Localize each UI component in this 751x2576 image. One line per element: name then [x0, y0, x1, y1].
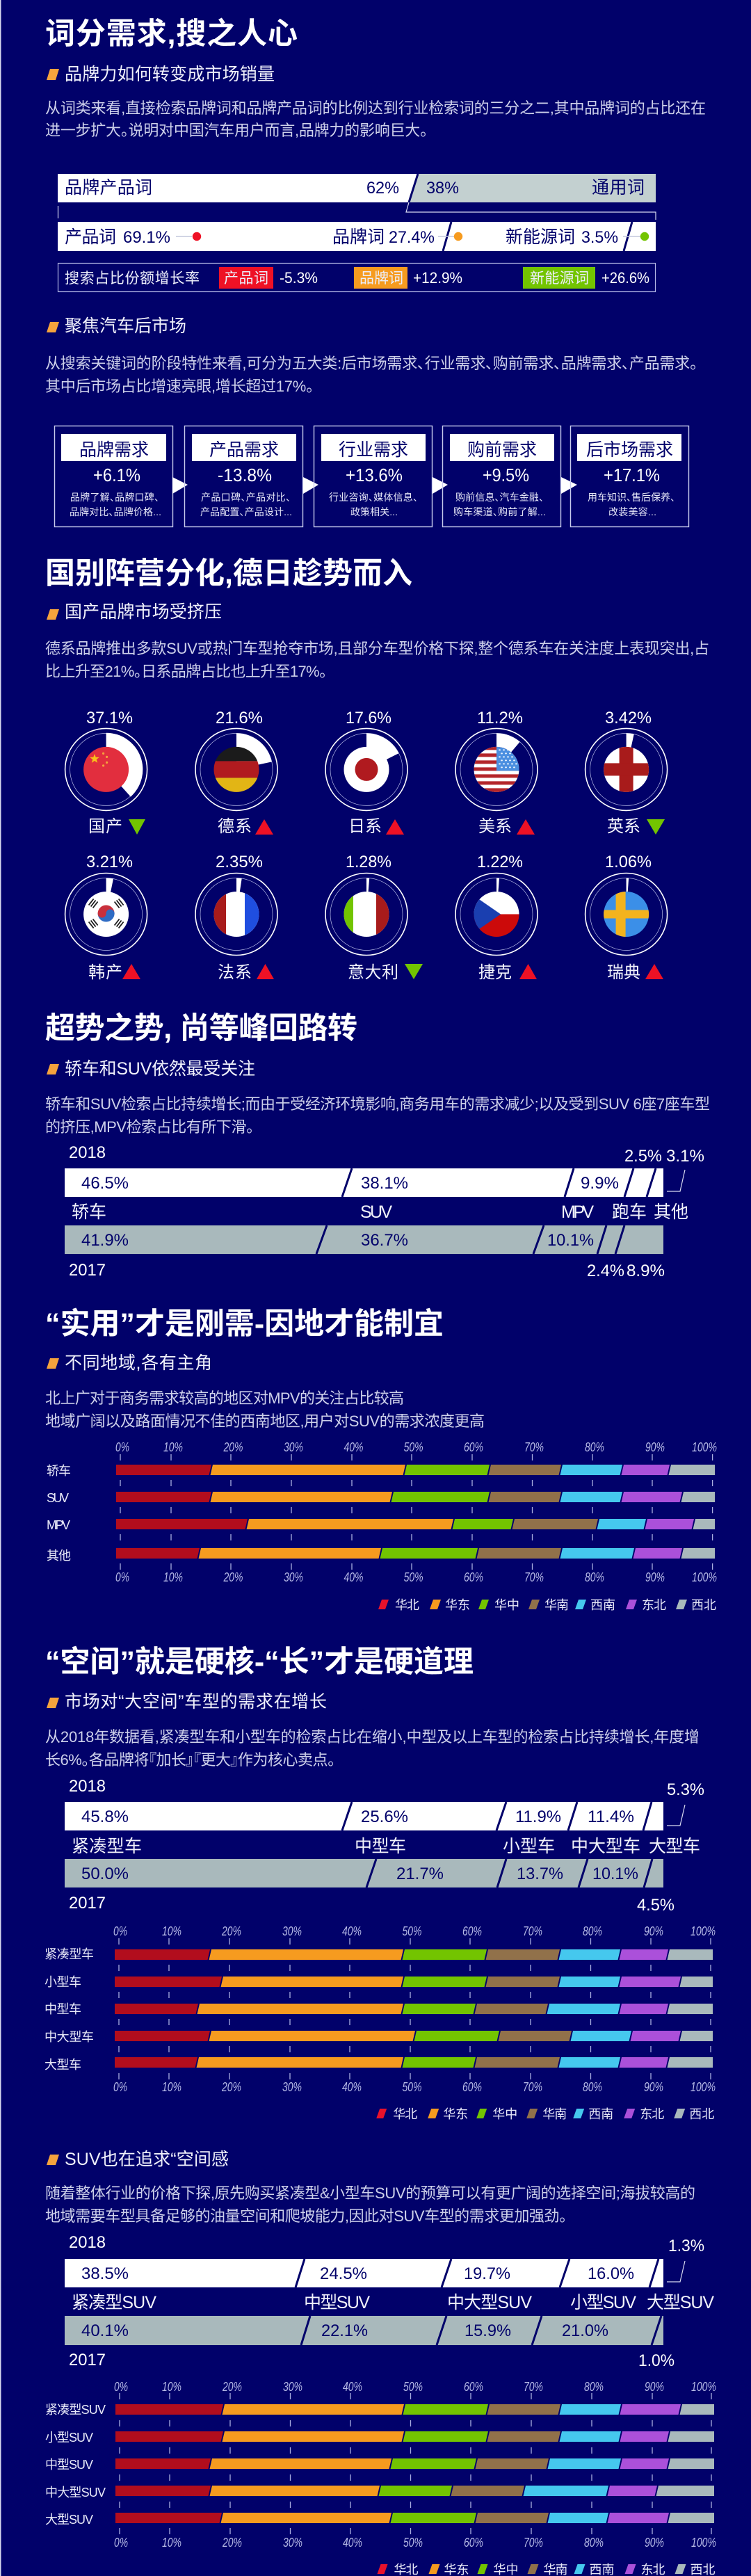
chart: SUV size share 2018 vs 2017: [65, 2233, 714, 2370]
legend: 西北: [689, 2107, 714, 2121]
chart: vehicle type share 2018 vs 2017: [65, 1143, 704, 1280]
growth rate box: 品牌词: [360, 271, 403, 287]
chart: car size share 2018 vs 2017: 45.8%: [81, 1808, 129, 1826]
axis labels top: 90%: [645, 1440, 665, 1454]
subheading: brand power: 品牌力如何转变成市场销量: [65, 65, 275, 84]
legend: 华南: [544, 1598, 569, 1612]
flag: England 3.42%: 3.42%: [605, 709, 652, 727]
axis labels top: 50%: [404, 1440, 423, 1454]
paragraph: regions: [45, 1390, 485, 1430]
chart: car size share 2018 vs 2017: 中大型车: [571, 1837, 640, 1856]
chart: SUV size share 2018 vs 2017: 19.7%: [464, 2264, 510, 2283]
axis labels bottom: 70%: [524, 1570, 544, 1584]
chart: vehicle type share 2018 vs 2017: 8.9%: [627, 1262, 665, 1280]
growth rate box: +26.6%: [601, 269, 649, 287]
growth rate box: 新能源词: [530, 271, 589, 287]
axis labels top: 10%: [162, 2380, 181, 2394]
flag: USA 11.2%: [455, 709, 538, 836]
axis labels top: [114, 2380, 716, 2394]
axis labels bottom: 40%: [342, 2080, 362, 2094]
axis labels bottom: 0%: [113, 2080, 127, 2094]
flag: Japan 17.6%: [325, 709, 407, 836]
row: sedan: 轿车: [47, 1464, 71, 1478]
paragraph: large space: 长6%。各品牌将『加长』『更大』作为核心卖点。: [45, 1751, 335, 1769]
paragraph: aftermarket: [45, 355, 697, 395]
row: compact: 紧凑型车: [45, 1947, 94, 1961]
chart: car size share 2018 vs 2017: 4.5%: [637, 1896, 675, 1915]
row: large SUV: 大型SUV: [45, 2513, 93, 2527]
row: other: [47, 1548, 715, 1561]
subheading: sedan and SUV: 轿车和SUV依然最受关注: [65, 1059, 255, 1079]
paragraph: regions: 地域广阔以及路面情况不佳的西南地区,用户对SUV的需求浓度更高: [45, 1412, 485, 1430]
row: mid-large: 中大型车: [45, 2030, 94, 2044]
card: brand demand: +6.1%: [93, 465, 140, 485]
legend: 华北: [395, 1598, 419, 1612]
row: small: 小型车: [45, 1975, 81, 1989]
flag: Sweden 1.06%: [586, 853, 668, 982]
arrow: [433, 477, 448, 494]
flag: Czech 1.22%: 捷克: [478, 963, 512, 982]
chart: SUV size share 2018 vs 2017: 1.0%: [638, 2351, 675, 2370]
flag: England 3.42%: 英系: [607, 817, 640, 836]
legend: 华中: [492, 2107, 517, 2121]
title: 超势之势, 尚等峰回路转: [45, 1012, 357, 1045]
card: brand demand: [54, 426, 172, 527]
paragraph: brand terms: 进一步扩大。说明对中国汽车用户而言,品牌力的影响巨大。: [45, 122, 428, 139]
axis labels bottom: 0%: [115, 1570, 129, 1584]
card: industry demand: 政策相关...: [350, 506, 398, 517]
axis labels top: 100%: [691, 2380, 716, 2394]
chart: SUV size share 2018 vs 2017: 22.1%: [321, 2321, 368, 2340]
flag: Czech 1.22%: [455, 853, 538, 982]
subheading: SUV space: SUV也在追求“空间感: [65, 2150, 229, 2169]
paragraph: SUV space: [45, 2184, 695, 2225]
panel: regional demand: [45, 1307, 718, 1612]
arrow: [303, 477, 318, 494]
chart: vehicle type share 2018 vs 2017: 3.1%: [666, 1147, 704, 1166]
flag: Czech 1.22%: 1.22%: [477, 853, 523, 871]
growth rate box: [58, 263, 655, 292]
paragraph: german and japanese brands: 比上升至21%。日系品牌占比也上升至17%。: [45, 663, 327, 680]
chart: car size share 2018 vs 2017: 10.1%: [592, 1865, 638, 1883]
flag: Korea 3.21%: [65, 853, 147, 982]
flag: Korea 3.21%: 韩产: [88, 963, 122, 982]
chart: vehicle type share 2018 vs 2017: 2.5%: [624, 1147, 662, 1166]
axis labels top: 60%: [462, 1924, 482, 1938]
chart: vehicle type share 2018 vs 2017: 2018: [69, 1143, 106, 1162]
row: compact SUV: 紧凑型SUV: [45, 2403, 106, 2417]
axis labels top: 30%: [284, 1440, 303, 1454]
chart: SUV size share 2018 vs 2017: 21.0%: [562, 2321, 608, 2340]
row: mid-large SUV: [46, 2486, 714, 2498]
paragraph: german and japanese brands: 德系品牌推出多款SUV或热门车型抢夺市场,且部分车型价格下探,整个德系车在关注度上表现突出,占: [45, 640, 709, 657]
flag: Sweden 1.06%: 瑞典: [607, 963, 640, 982]
legend: 东北: [640, 2107, 664, 2121]
row: midsize: 中型车: [45, 2002, 81, 2016]
card: product demand: -13.8%: [218, 465, 272, 485]
axis labels bottom: 30%: [283, 2536, 302, 2550]
flag: Italy 1.28%: [325, 853, 423, 982]
paragraph: german and japanese brands: [45, 640, 709, 680]
card: product demand: 产品需求: [209, 440, 279, 460]
axis labels bottom: 80%: [583, 2080, 602, 2094]
chart: car size share 2018 vs 2017: 小型车: [503, 1837, 555, 1856]
axis labels bottom: 80%: [585, 1570, 604, 1584]
connector lines: [58, 202, 656, 220]
axis labels top: 50%: [402, 1924, 421, 1938]
card: industry demand: 行业需求: [339, 440, 408, 460]
card: aftermarket demand: 后市场需求: [586, 440, 673, 460]
axis labels top: 60%: [464, 1440, 483, 1454]
axis labels bottom: 30%: [284, 1570, 303, 1584]
legend: [377, 2563, 715, 2576]
row: SUV: [47, 1492, 715, 1502]
flag: Italy 1.28%: 意大利: [348, 963, 398, 982]
axis labels bottom: 10%: [162, 2080, 181, 2094]
axis labels bottom: 60%: [464, 1570, 483, 1584]
axis labels bottom: 100%: [692, 1570, 717, 1584]
row: mid-large: [46, 2030, 713, 2042]
axis labels bottom: 30%: [282, 2080, 302, 2094]
chart: SUV size share 2018 vs 2017: 40.1%: [81, 2321, 129, 2340]
paragraph: SUV space: 随着整体行业的价格下探,原先购买紧凑型&小型车SUV的预算可以有更广阔的选择空间;海拔较高的: [45, 2184, 695, 2202]
flag: USA 11.2%: 美系: [478, 817, 512, 836]
flag: China 37.1%: [65, 709, 147, 836]
flag: Japan 17.6%: 日系: [348, 817, 382, 836]
bar: brand term breakdown: 品牌词: [332, 227, 385, 247]
axis labels bottom: [114, 2536, 716, 2550]
axis labels top: 20%: [223, 1440, 243, 1454]
axis labels top: 80%: [584, 2380, 604, 2394]
flag: France 2.35%: 2.35%: [216, 853, 263, 871]
axis labels top: 70%: [523, 1924, 542, 1938]
axis labels top: 100%: [691, 1924, 716, 1938]
paragraph: brand terms: 从词类来看,直接检索品牌词和品牌产品词的比例达到行业检索词的三分之二,其中品牌词的占比还在: [45, 99, 706, 117]
bar: brand term breakdown: 3.5%: [581, 228, 618, 247]
axis labels bottom: 20%: [221, 2080, 241, 2094]
legend: 华南: [542, 2107, 567, 2121]
axis labels top: [113, 1924, 716, 1938]
chart: car size share 2018 vs 2017: 紧凑型车: [72, 1837, 142, 1856]
growth rate box: 搜索占比份额增长率: [65, 271, 200, 287]
axis labels bottom: 90%: [645, 1570, 665, 1584]
paragraph: sedan and SUV: [45, 1095, 710, 1136]
chart: region share by SUV size: [45, 2380, 718, 2576]
axis labels bottom: 20%: [222, 2536, 242, 2550]
chart: SUV size share 2018 vs 2017: 紧凑型SUV: [72, 2293, 156, 2312]
chart: car size share 2018 vs 2017: 11.4%: [588, 1808, 634, 1826]
bar: brand term breakdown: 产品词: [65, 227, 116, 247]
axis labels top: 10%: [162, 1924, 181, 1938]
row: mid-large SUV: 中大型SUV: [45, 2486, 106, 2499]
legend: 华北: [393, 2107, 417, 2121]
axis labels top: 40%: [343, 2380, 362, 2394]
card: pre-purchase demand: 购前需求: [467, 440, 537, 460]
chart: vehicle type share 2018 vs 2017: 38.1%: [361, 1174, 408, 1193]
row: small SUV: [46, 2431, 714, 2442]
row: large: [45, 2057, 713, 2070]
axis labels top: 50%: [403, 2380, 423, 2394]
card: aftermarket demand: +17.1%: [604, 465, 660, 485]
chart: vehicle type share 2018 vs 2017: 10.1%: [547, 1231, 594, 1250]
axis labels top: 0%: [115, 1440, 129, 1454]
card: industry demand: [314, 426, 433, 527]
axis labels bottom: 0%: [114, 2536, 128, 2550]
subheading: regions: 不同地域,各有主角: [65, 1353, 212, 1373]
bar: brand term breakdown: [58, 222, 656, 251]
axis labels bottom: 70%: [524, 2536, 543, 2550]
legend: 西南: [590, 1598, 615, 1612]
subheading: large space: 市场对“大空间”车型的需求在增长: [65, 1692, 327, 1712]
chart: car size share 2018 vs 2017: 25.6%: [361, 1808, 408, 1826]
panel: country camps: [45, 557, 709, 982]
chart: SUV size share 2018 vs 2017: 中型SUV: [304, 2293, 370, 2312]
card: product demand: [185, 426, 303, 527]
row: other: 其他: [47, 1549, 71, 1563]
row: SUV: SUV: [47, 1491, 69, 1505]
card: brand demand: 品牌对比、品牌价格...: [70, 506, 161, 517]
axis labels top: 60%: [464, 2380, 483, 2394]
axis labels top: 0%: [114, 2380, 128, 2394]
card: industry demand: +13.6%: [346, 465, 403, 485]
flag: China 37.1%: 国产: [88, 817, 122, 836]
panel: search term demand: [45, 17, 706, 292]
flag: Germany 21.6%: 21.6%: [216, 709, 263, 727]
card: brand demand: 品牌需求: [79, 440, 149, 460]
axis labels top: [115, 1440, 717, 1454]
paragraph: SUV space: 地域需要车型具备足够的油量空间和爬坡能力,因此对SUV车型的需求更加强劲。: [45, 2207, 567, 2225]
chart: car size share 2018 vs 2017: 50.0%: [81, 1865, 129, 1883]
chart: vehicle type share 2018 vs 2017: 其他: [654, 1202, 688, 1222]
card: aftermarket demand: 用车知识、售后保养、: [588, 492, 675, 503]
flag: Germany 21.6%: 德系: [218, 817, 252, 836]
flag: England 3.42%: [586, 709, 668, 836]
row: compact SUV: [46, 2404, 714, 2415]
title: “实用”才是刚需-因地才能制宜: [45, 1307, 444, 1341]
chart: SUV size share 2018 vs 2017: 小型SUV: [570, 2293, 636, 2312]
bar: brand term breakdown: 27.4%: [389, 228, 435, 247]
chart: car size share 2018 vs 2017: 2018: [69, 1777, 106, 1796]
growth rate box: -5.3%: [280, 269, 318, 287]
card: pre-purchase demand: [442, 426, 560, 527]
chart: region share by body type: [47, 1440, 718, 1612]
axis labels bottom: 40%: [343, 2536, 362, 2550]
legend: 华中: [494, 1598, 519, 1612]
axis labels top: 90%: [645, 2380, 664, 2394]
card: aftermarket demand: [570, 426, 688, 527]
bar: brand product terms vs generic terms: 62%: [366, 179, 399, 198]
chart: vehicle type share 2018 vs 2017: 跑车: [612, 1202, 647, 1222]
card: pre-purchase demand: 购车渠道、购前了解...: [453, 506, 546, 517]
paragraph: aftermarket: 从搜索关键词的阶段特性来看,可分为五大类:后市场需求、行业需求、购前需求、品牌需求、产品需求。: [45, 355, 697, 372]
chart: SUV size share 2018 vs 2017: 24.5%: [320, 2264, 367, 2283]
chart: car size share 2018 vs 2017: 11.9%: [515, 1808, 561, 1826]
axis labels top: 90%: [644, 1924, 663, 1938]
axis labels bottom: 70%: [523, 2080, 542, 2094]
subheading: domestic brands: 国产品牌市场受挤压: [65, 602, 222, 622]
paragraph: large space: [45, 1728, 700, 1769]
paragraph: brand terms: [45, 99, 706, 139]
paragraph: aftermarket: 其中后市场占比增速亮眼,增长超过17%。: [45, 378, 314, 395]
chart: vehicle type share 2018 vs 2017: 轿车: [72, 1202, 106, 1222]
row: midsize: [46, 2002, 713, 2014]
paragraph: sedan and SUV: 的挤压,MPV检索占比有所下滑。: [45, 1118, 254, 1136]
chart: car size share 2018 vs 2017: 中型车: [355, 1837, 406, 1856]
title: 词分需求,搜之人心: [45, 17, 298, 51]
subheading: aftermarket: 聚焦汽车后市场: [65, 316, 186, 336]
flag: Germany 21.6%: [195, 709, 277, 836]
flag: Italy 1.28%: 1.28%: [346, 853, 391, 871]
paragraph: large space: 从2018年数据看,紧凑型车和小型车的检索占比在缩小,中型及以上车型的检索占比持续增长,年度增: [45, 1728, 700, 1746]
row: small SUV: 小型SUV: [45, 2431, 93, 2445]
chart: vehicle type share 2018 vs 2017: 2017: [69, 1261, 106, 1280]
row: midsize SUV: [46, 2458, 714, 2470]
card: pre-purchase demand: +9.5%: [483, 465, 529, 485]
axis labels bottom: 20%: [223, 1570, 243, 1584]
panel: vehicle type trend: [45, 1012, 710, 1280]
axis labels bottom: 50%: [404, 1570, 423, 1584]
flag: USA 11.2%: 11.2%: [477, 709, 523, 727]
axis labels top: 20%: [222, 2380, 242, 2394]
panel: aftermarket: [45, 316, 697, 527]
row: large SUV: [46, 2513, 714, 2525]
chart: SUV size share 2018 vs 2017: 15.9%: [465, 2321, 511, 2340]
paragraph: sedan and SUV: 轿车和SUV检索占比持续增长;而由于受经济环境影响,商务用车的需求减少;以及受到SUV 6座7座车型: [45, 1095, 710, 1113]
axis labels bottom: 80%: [584, 2536, 604, 2550]
card: pre-purchase demand: 购前信息、汽车金融、: [455, 492, 544, 503]
axis labels top: 70%: [524, 2380, 543, 2394]
paragraph: regions: 北上广对于商务需求较高的地区对MPV的关注占比较高: [45, 1390, 404, 1407]
chart: SUV size share 2018 vs 2017: 38.5%: [81, 2264, 129, 2283]
chart: vehicle type share 2018 vs 2017: 9.9%: [581, 1174, 619, 1193]
panel: SUV space: [45, 2150, 718, 2576]
axis labels top: 20%: [221, 1924, 241, 1938]
axis labels bottom: 90%: [644, 2080, 663, 2094]
chart: car size share 2018 vs 2017: 大型车: [649, 1837, 700, 1856]
bar: brand product terms vs generic terms: 38%: [426, 179, 459, 198]
chart: SUV size share 2018 vs 2017: 2018: [69, 2233, 106, 2252]
row: sedan: [47, 1464, 715, 1476]
bar: brand product terms vs generic terms: 品牌产品词: [65, 178, 152, 198]
chart: vehicle type share 2018 vs 2017: MPV: [561, 1202, 594, 1222]
legend: 华东: [443, 2107, 468, 2121]
axis labels bottom: 90%: [645, 2536, 664, 2550]
row: compact: [45, 1947, 713, 1960]
axis labels top: 100%: [692, 1440, 717, 1454]
chart: SUV size share 2018 vs 2017: 2017: [69, 2351, 106, 2369]
arrow: [172, 477, 188, 494]
legend: [376, 2107, 714, 2121]
growth rate box: +12.9%: [413, 269, 462, 287]
flag: France 2.35%: [195, 853, 277, 982]
legend: [378, 1598, 716, 1612]
legend: 华东: [445, 1598, 470, 1612]
legend: 东北: [642, 1598, 666, 1612]
row: large: 大型车: [45, 2058, 81, 2072]
axis labels bottom: 10%: [163, 1570, 183, 1584]
title: 国别阵营分化,德日趁势而入: [45, 557, 412, 590]
axis labels bottom: 60%: [462, 2080, 482, 2094]
axis labels top: 0%: [113, 1924, 127, 1938]
growth rate box: 产品词: [224, 271, 268, 287]
bar: brand term breakdown: 69.1%: [123, 228, 170, 247]
card: product demand: 产品配置、产品设计...: [200, 506, 292, 517]
axis labels top: 30%: [283, 2380, 302, 2394]
chart: vehicle type share 2018 vs 2017: 41.9%: [81, 1231, 129, 1250]
flag: France 2.35%: 法系: [218, 963, 252, 982]
card: aftermarket demand: 改装美容...: [608, 506, 656, 517]
chart: car size share 2018 vs 2017: 13.7%: [517, 1865, 563, 1883]
title: “空间”就是硬核-“长”才是硬道理: [45, 1645, 474, 1679]
axis labels bottom: 10%: [162, 2536, 181, 2550]
arrow: [561, 477, 577, 494]
axis labels bottom: 40%: [344, 1570, 363, 1584]
card: industry demand: 行业咨询、媒体信息、: [329, 492, 418, 503]
legend: 西南: [588, 2107, 613, 2121]
chart: SUV size share 2018 vs 2017: 中大型SUV: [447, 2293, 532, 2312]
bar: brand product terms vs generic terms: 通用词: [592, 178, 645, 198]
axis labels bottom: 50%: [402, 2080, 421, 2094]
axis labels top: 40%: [342, 1924, 362, 1938]
chart: SUV size share 2018 vs 2017: 16.0%: [588, 2264, 634, 2283]
bar: brand term breakdown: 新能源词: [506, 227, 575, 247]
row: small: [45, 1975, 713, 1988]
axis labels bottom: 100%: [691, 2536, 716, 2550]
axis labels top: 40%: [344, 1440, 363, 1454]
chart: car size share 2018 vs 2017: 21.7%: [396, 1865, 444, 1883]
row: MPV: MPV: [47, 1518, 70, 1532]
flag: Sweden 1.06%: 1.06%: [605, 853, 652, 871]
chart: car size share 2018 vs 2017: 2017: [69, 1894, 106, 1913]
axis labels top: 10%: [163, 1440, 183, 1454]
axis labels top: 80%: [583, 1924, 602, 1938]
row: MPV: [47, 1519, 715, 1529]
chart: region share by car size: [45, 1924, 716, 2121]
chart: vehicle type share 2018 vs 2017: SUV: [360, 1202, 392, 1222]
axis labels top: 80%: [585, 1440, 604, 1454]
axis labels top: 70%: [524, 1440, 544, 1454]
axis labels bottom: 60%: [464, 2536, 483, 2550]
chart: SUV size share 2018 vs 2017: 大型SUV: [647, 2293, 714, 2312]
flag: Japan 17.6%: 17.6%: [346, 709, 391, 727]
legend: 西北: [691, 1598, 716, 1612]
flag: Korea 3.21%: 3.21%: [86, 853, 133, 871]
card: product demand: 产品口碑、产品对比、: [201, 492, 291, 503]
chart: SUV size share 2018 vs 2017: 1.3%: [668, 2237, 704, 2255]
chart: vehicle type share 2018 vs 2017: 2.4%: [587, 1262, 624, 1280]
bar: brand product terms vs generic terms: [58, 174, 656, 202]
chart: car size share 2018 vs 2017: [65, 1777, 704, 1915]
panel: space demand by size: [45, 1645, 716, 2121]
flag: China 37.1%: 37.1%: [86, 709, 133, 727]
axis labels bottom: [115, 1570, 717, 1584]
axis labels bottom: [113, 2080, 716, 2094]
row: midsize SUV: 中型SUV: [45, 2458, 93, 2472]
chart: vehicle type share 2018 vs 2017: 36.7%: [361, 1231, 408, 1250]
card: brand demand: 品牌了解、品牌口碑、: [70, 492, 159, 503]
axis labels top: 30%: [282, 1924, 302, 1938]
axis labels bottom: 100%: [691, 2080, 716, 2094]
chart: vehicle type share 2018 vs 2017: 46.5%: [81, 1174, 129, 1193]
axis labels bottom: 50%: [403, 2536, 423, 2550]
chart: car size share 2018 vs 2017: 5.3%: [667, 1780, 704, 1799]
